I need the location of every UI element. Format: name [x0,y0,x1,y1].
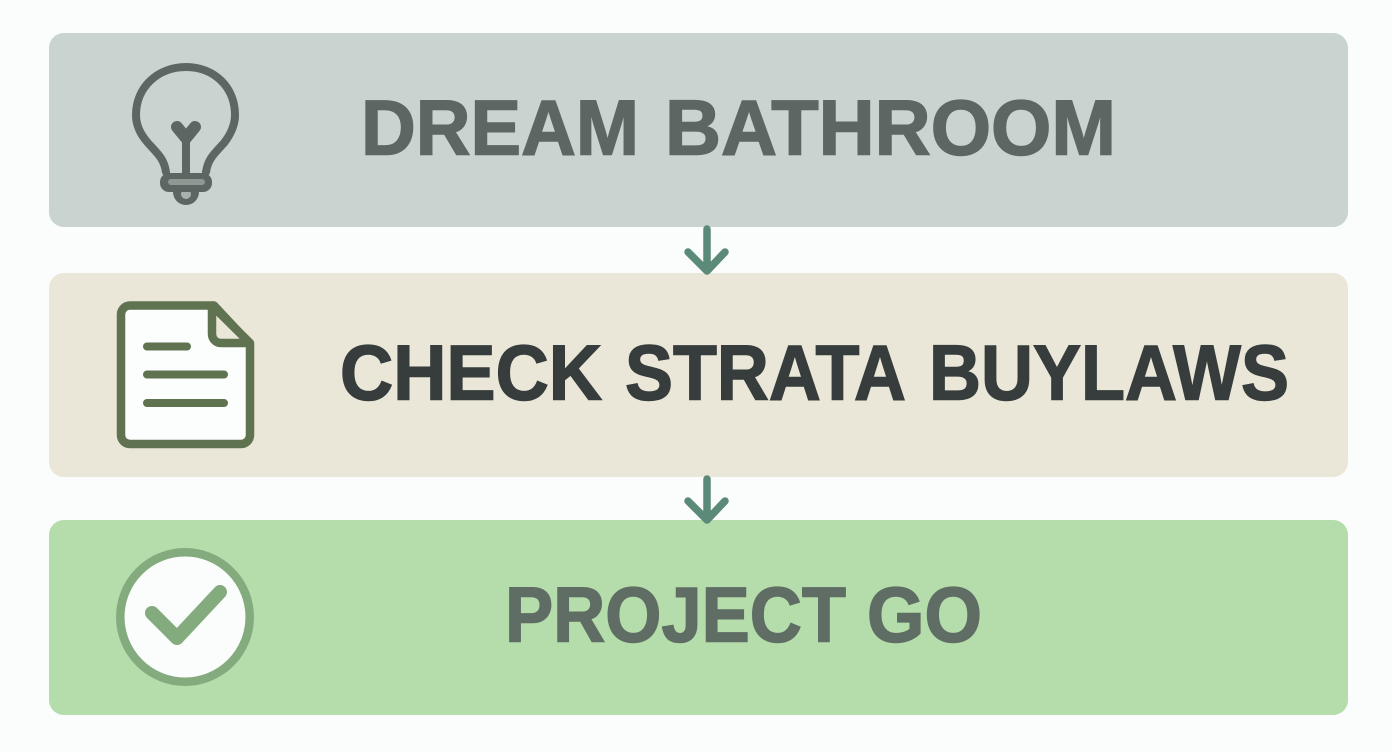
heading: project go: PROJECT [505,570,846,658]
heading: dream bathroom: BATHROOM [665,83,1116,171]
panel: project go [49,520,1348,715]
icon: light bulb [136,67,235,205]
heading: check strata buylaws: CHECK [340,328,602,416]
icon: document [121,306,250,444]
heading: project go: GO [867,570,982,658]
arrow: second step down [688,479,725,520]
heading: dream bathroom: DREAM [361,83,639,171]
heading: check strata buylaws: STRATA [625,328,906,416]
heading: check strata buylaws: BUYLAWS [929,328,1289,416]
panel: dream bathroom [49,33,1348,227]
heading: dream bathroom [361,83,1116,171]
heading: check strata buylaws [340,328,1289,416]
arrow: first step down [688,229,725,271]
panel: check strata buylaws [49,273,1348,477]
icon: check mark [120,552,250,682]
